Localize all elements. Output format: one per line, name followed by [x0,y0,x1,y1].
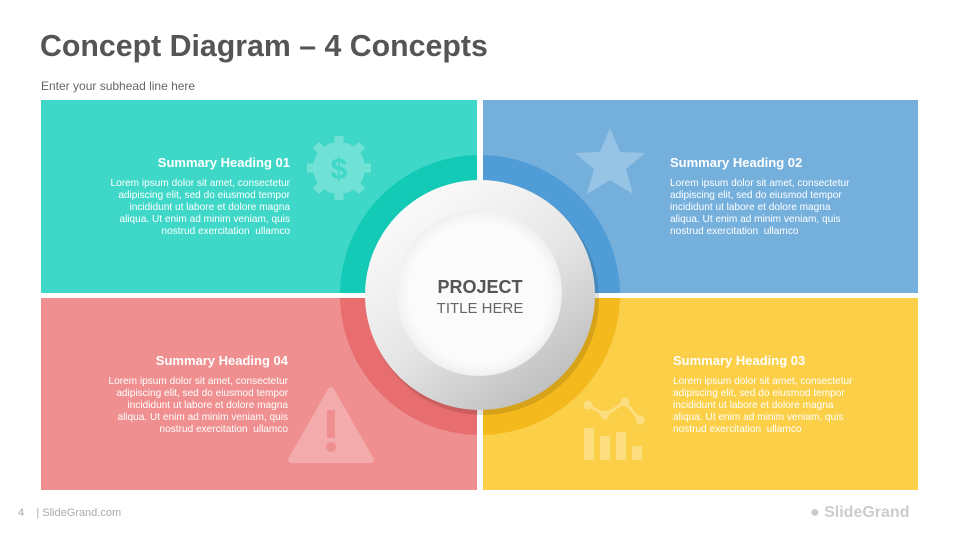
footer: 4 | SlideGrand.com [18,507,121,519]
white button: TITLE HERE [437,300,523,317]
text block: 02: Summary Heading 02 [670,155,802,170]
text block: 04: adipiscing elit, sed do eiusmod tempor [116,388,288,399]
center diagram [288,128,645,463]
text block: 03: Summary Heading 03 [673,353,805,368]
text block: 02: Lorem ipsum dolor sit amet, consectetur [670,178,850,189]
text block: 04: nostrud exercitation ullamco [160,424,288,435]
text block: 02: aliqua. Ut enim ad minim veniam, quis [670,214,841,225]
text block: 01: Summary Heading 01 [158,155,290,170]
text block: 04 [108,353,288,435]
icon: gear dollar: $ [331,153,348,186]
panel: 04 [41,298,477,490]
text block: 01 [110,155,290,237]
ring segments [340,155,620,435]
subhead: Enter your subhead line here [41,79,195,93]
text block: 02: incididunt ut labore et dolore magna [670,202,830,213]
text block: 03: adipiscing elit, sed do eiusmod tempor [673,388,845,399]
panel: 01 [41,100,477,293]
icon: warning [291,390,371,460]
panel: 03 [483,298,918,490]
icon: chart [584,398,644,460]
text block: 04: Lorem ipsum dolor sit amet, consectetur [108,376,288,387]
logo: ● SlideGrand [810,504,909,521]
text block: 04: Summary Heading 04 [156,353,288,368]
text block: 03: Lorem ipsum dolor sit amet, consectetur [673,376,853,387]
text block: 04: incididunt ut labore et dolore magna [128,400,288,411]
text block: 01: incididunt ut labore et dolore magna [130,202,290,213]
text block: 03 [673,353,853,435]
icon: star [575,128,645,194]
text block: 02: adipiscing elit, sed do eiusmod tempor [670,190,842,201]
white button [365,180,599,415]
text block: 03: incididunt ut labore et dolore magna [673,400,834,411]
text block: 03: nostrud exercitation ullamco [673,424,801,435]
white button: PROJECT [437,277,523,297]
text block: 02: nostrud exercitation ullamco [670,226,798,237]
text block: 01: aliqua. Ut enim ad minim veniam, quis [119,214,290,225]
text block: 02 [670,155,850,237]
title: Concept Diagram – 4 Concepts [40,30,488,63]
text block: 03: aliqua. Ut enim ad minim veniam, quis [673,412,844,423]
text block: 01: nostrud exercitation ullamco [162,226,290,237]
text block: 01: adipiscing elit, sed do eiusmod tempor [118,190,290,201]
icon: gear dollar [307,136,371,200]
text block: 01: Lorem ipsum dolor sit amet, consectetur [110,178,290,189]
panel: 02 [483,100,918,293]
text block: 04: aliqua. Ut enim ad minim veniam, quis [117,412,288,423]
